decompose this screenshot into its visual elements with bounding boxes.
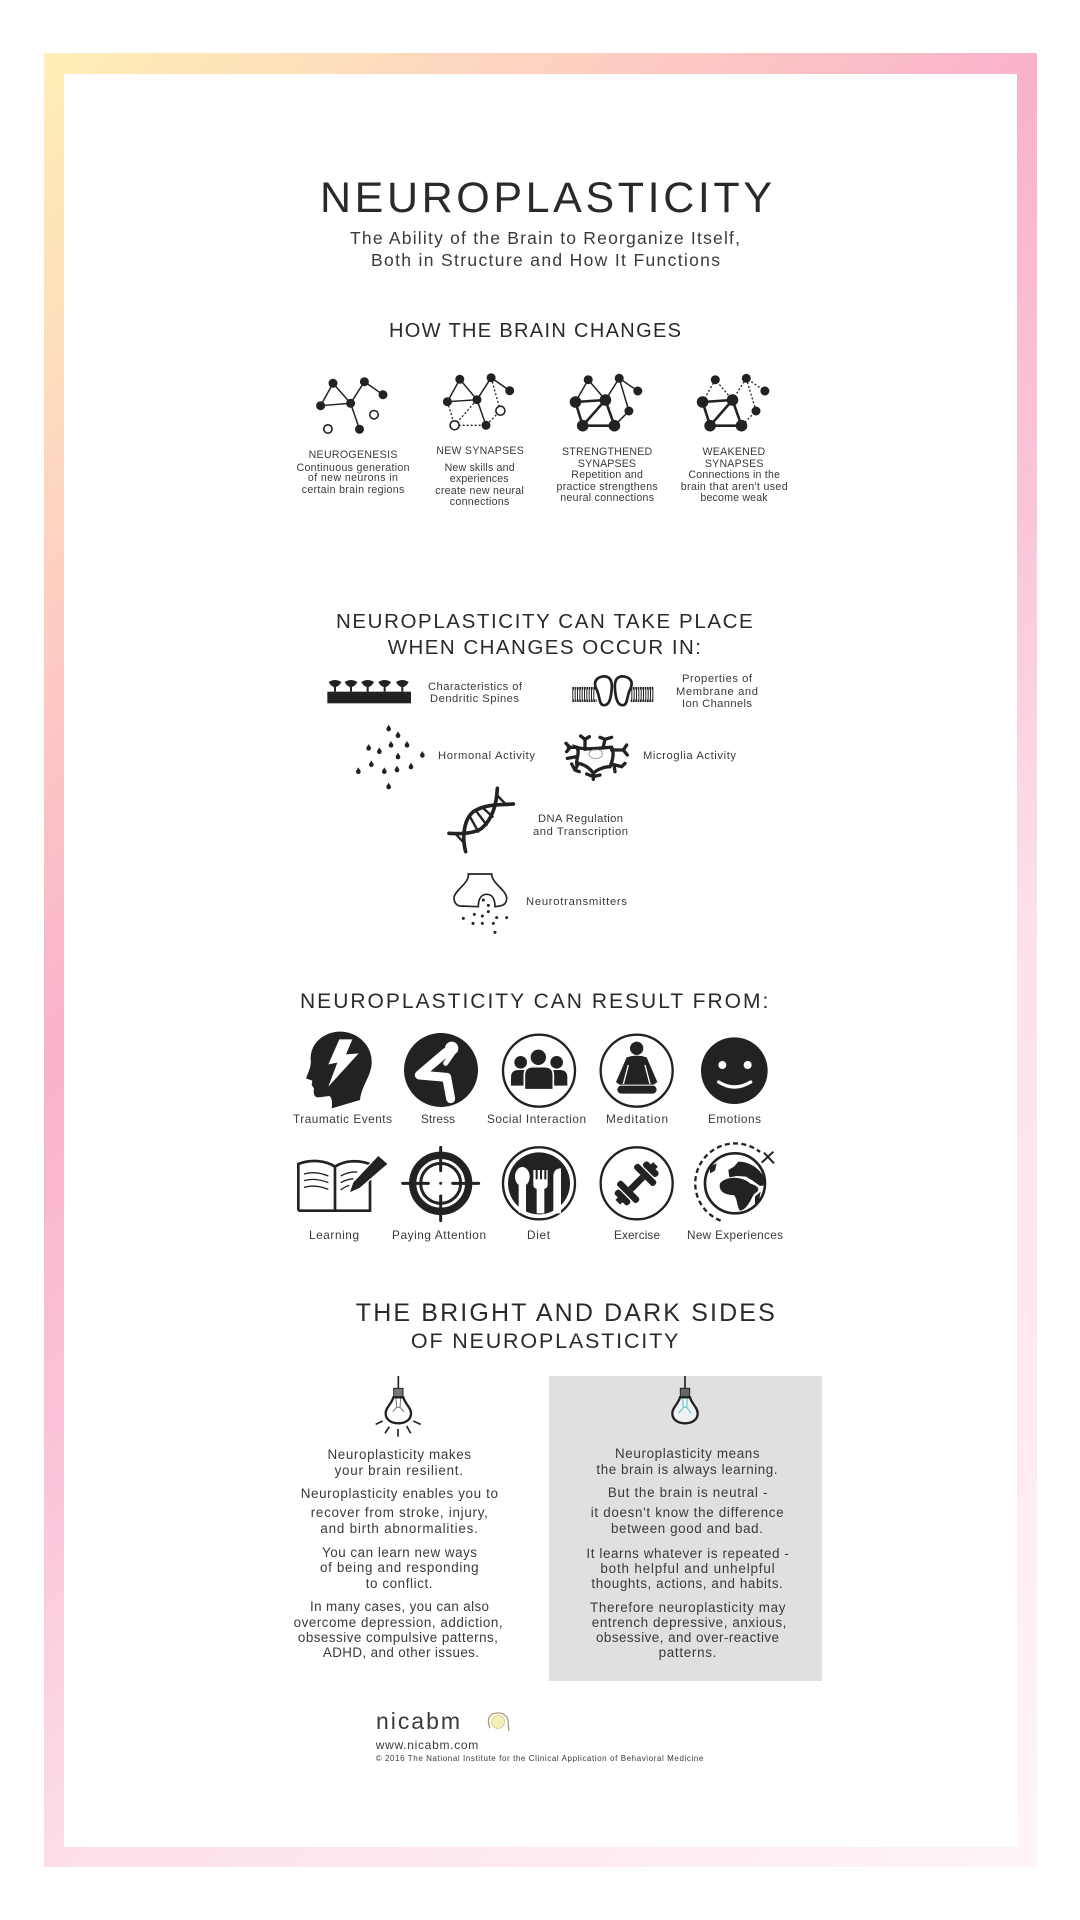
label: strengthened synapses (556, 446, 658, 504)
label: neurogenesis: certain brain regions (302, 484, 404, 496)
label: social interaction: Social Interaction (487, 1112, 586, 1126)
icon: new experiences globe (695, 1143, 774, 1221)
label: diet: Diet (527, 1228, 551, 1242)
panel: dark side background (549, 1376, 822, 1681)
label: dendritic spines: Dendritic Spines (430, 693, 519, 705)
footer (375, 1708, 704, 1763)
heading: how the brain changes: HOW THE BRAIN CHANGES (389, 320, 681, 342)
text: bright side: You can learn new ways (322, 1545, 477, 1560)
text: dark side: But the brain is neutral - (608, 1485, 768, 1500)
icon: strengthened synapses network (570, 374, 642, 432)
icon: meditation (601, 1035, 673, 1107)
icon: traumatic events head (306, 1032, 372, 1108)
text: dark side: between good and bad. (611, 1521, 763, 1536)
text: bright side: Neuroplasticity enables you to (301, 1486, 498, 1501)
label: dna regulation (533, 813, 628, 838)
icon: hormone drops (356, 725, 425, 789)
text: dark side: thoughts, actions, and habits. (591, 1576, 783, 1591)
text: bright side: of being and responding (320, 1560, 479, 1575)
label: new experiences: New Experiences (687, 1228, 783, 1242)
label: emotions: Emotions (708, 1112, 761, 1126)
icon: stress (404, 1033, 478, 1107)
heading: take place (336, 610, 753, 659)
label: strengthened synapses: STRENGTHENED (562, 446, 653, 458)
icon: new synapses network (443, 373, 514, 430)
label: dna regulation: and Transcription (533, 826, 628, 838)
text: bright side: In many cases, you can also (310, 1599, 489, 1614)
label: meditation: Meditation (606, 1112, 668, 1126)
label: weakened synapses: Connections in the (688, 469, 780, 481)
heading: bright and dark sides: OF NEUROPLASTICITY (411, 1329, 678, 1353)
label: weakened synapses: WEAKENED (702, 446, 766, 458)
label: strengthened synapses: SYNAPSES (578, 458, 636, 470)
label: dendritic spines (428, 681, 523, 705)
label: strengthened synapses: Repetition and (571, 469, 643, 481)
label: weakened synapses: SYNAPSES (705, 458, 764, 470)
text: dark side: It learns whatever is repeated - (586, 1546, 789, 1561)
website: www.nicabm.com (375, 1738, 478, 1752)
label: new synapses: NEW SYNAPSES (436, 445, 524, 457)
panel: can result from (293, 990, 783, 1242)
text: dark side: Neuroplasticity means (615, 1446, 760, 1461)
icon: exercise dumbbell (601, 1147, 673, 1219)
label: neurogenesis: of new neurons in (308, 472, 398, 484)
icon: microglia cell (566, 736, 627, 779)
heading: bright and dark sides (356, 1299, 775, 1353)
label: weakened synapses: become weak (700, 492, 768, 504)
label: neurotransmitters: Neurotransmitters (526, 896, 627, 908)
icon: attention target (403, 1147, 479, 1221)
label: weakened synapses: brain that aren't used (681, 481, 788, 493)
heading: bright and dark sides: THE BRIGHT AND DARK SIDES (356, 1299, 775, 1327)
subtitle: The Ability of the Brain to Reorganize Itself, (350, 228, 740, 248)
icon: dark bulb (672, 1376, 698, 1423)
title: NEUROPLASTICITY (320, 174, 772, 222)
text: dark side (586, 1446, 789, 1660)
label: neurogenesis (296, 449, 410, 496)
label: membrane and ion channels: Properties of (682, 673, 753, 685)
heading: result from: NEUROPLASTICITY CAN RESULT FROM: (300, 990, 768, 1013)
label: hormonal activity: Hormonal Activity (438, 750, 535, 762)
subtitle: Both in Structure and How It Functions (371, 250, 720, 270)
text: bright side: ADHD, and other issues. (323, 1645, 479, 1660)
label: dendritic spines: Characteristics of (428, 681, 523, 693)
label: strengthened synapses: neural connections (560, 492, 654, 504)
text: dark side: entrench depressive, anxious, (592, 1615, 786, 1630)
heading: take place: WHEN CHANGES OCCUR IN: (388, 636, 701, 659)
panel: changes occur in (327, 610, 758, 934)
label: stress: Stress (421, 1112, 455, 1126)
icon: logo head (488, 1713, 509, 1731)
text: dark side: the brain is always learning. (596, 1462, 778, 1477)
label: membrane and ion channels (676, 673, 758, 710)
text: bright side: to conflict. (366, 1576, 432, 1591)
label: traumatic events: Traumatic Events (293, 1112, 392, 1126)
icon: membrane ion channels (572, 676, 653, 705)
label: paying attention: Paying Attention (392, 1228, 486, 1242)
icon: social interaction (503, 1035, 575, 1107)
icon: neurotransmitter release (454, 874, 508, 934)
label: dna regulation: DNA Regulation (538, 813, 623, 825)
icon: dendritic spines (327, 680, 411, 703)
title block (320, 174, 772, 270)
text: bright side: obsessive compulsive patterns, (298, 1630, 498, 1645)
text: bright side (294, 1447, 503, 1660)
text: dark side: Therefore neuroplasticity may (590, 1600, 786, 1615)
label: new synapses (435, 445, 524, 508)
label: membrane and ion channels: Ion Channels (682, 698, 752, 710)
label: new synapses: create new neural (435, 485, 524, 497)
icon: bright bulb (376, 1376, 421, 1437)
label: membrane and ion channels: Membrane and (676, 686, 758, 698)
subtitle (350, 228, 740, 270)
panel: how the brain changes (296, 320, 788, 508)
label: learning: Learning (309, 1228, 359, 1242)
text: bright side: recover from stroke, injury, (311, 1505, 488, 1520)
label: strengthened synapses: practice strengthens (556, 481, 658, 493)
text: dark side: both helpful and unhelpful (600, 1561, 775, 1576)
icon: dna helix (449, 788, 513, 852)
label: neurogenesis: NEUROGENESIS (309, 449, 397, 461)
text: bright side: your brain resilient. (335, 1463, 463, 1478)
icon: neurogenesis network (316, 377, 388, 434)
panel: bright and dark sides (294, 1299, 822, 1681)
text: dark side: obsessive, and over-reactive (596, 1630, 779, 1645)
label: new synapses: experiences (450, 473, 509, 485)
text: dark side: it doesn't know the difference (591, 1505, 784, 1520)
icon: weakened synapses network (697, 374, 769, 432)
label: weakened synapses (681, 446, 788, 504)
copyright: © 2016 The National Institute for the Clinical Application of Behavioral Medicine (376, 1754, 704, 1763)
heading: take place: NEUROPLASTICITY CAN TAKE PLACE (336, 610, 753, 633)
text: bright side: overcome depression, addiction, (294, 1615, 503, 1630)
label: microglia activity: Microglia Activity (643, 750, 736, 762)
logo wordmark: nicabm (376, 1708, 460, 1734)
icon: diet cutlery (503, 1147, 575, 1219)
text: dark side: patterns. (659, 1645, 716, 1660)
text: bright side: and birth abnormalities. (320, 1521, 478, 1536)
label: neurogenesis: Continuous generation (296, 462, 410, 474)
icon: learning book (298, 1155, 388, 1211)
label: new synapses: New skills and (445, 462, 515, 474)
label: new synapses: connections (450, 496, 509, 508)
text: bright side: Neuroplasticity makes (328, 1447, 471, 1462)
icon: emotions smile (701, 1037, 768, 1104)
label: exercise: Exercise (614, 1228, 660, 1242)
